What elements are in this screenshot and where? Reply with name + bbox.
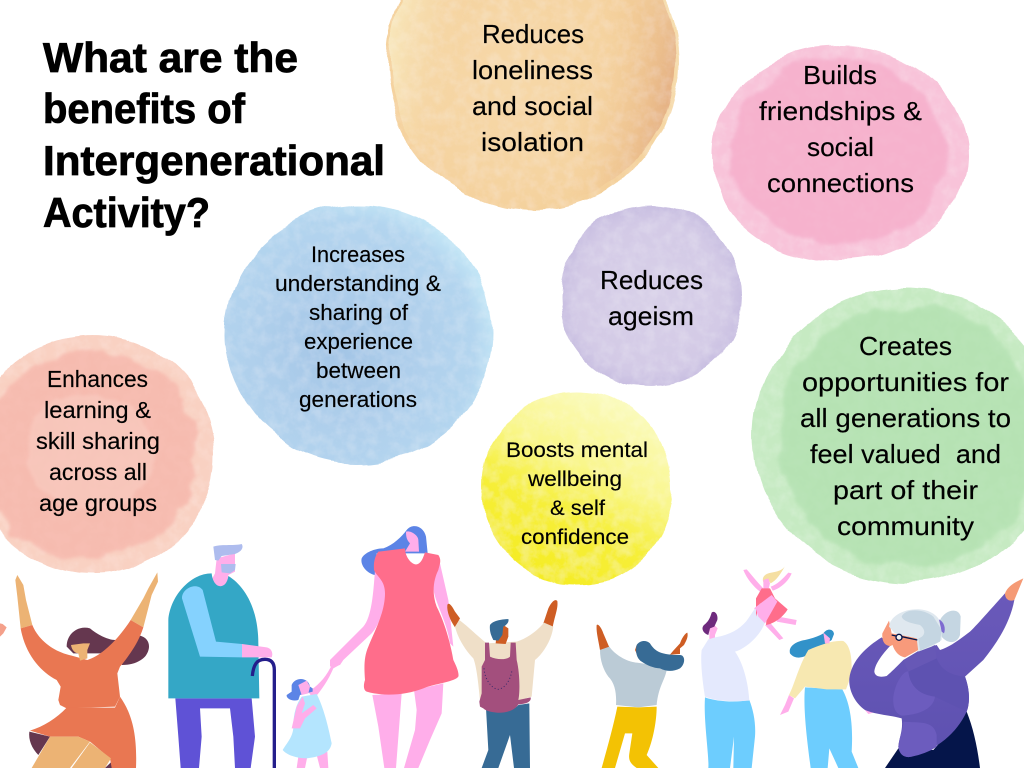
panel: boosts mental wellbeing <box>482 391 672 585</box>
panel: enhances learning <box>0 335 214 575</box>
text: builds friendships: social <box>807 132 874 162</box>
figure: hand and hair continuation <box>680 633 688 668</box>
text: reduces loneliness: and social <box>472 91 593 121</box>
title <box>43 34 385 236</box>
text: boosts mental wellbeing: confidence <box>521 526 629 549</box>
text: enhances learning: across all <box>49 459 147 485</box>
text: reduces loneliness: Reduces <box>482 19 584 49</box>
text: builds friendships <box>759 60 922 198</box>
text: reduces loneliness: loneliness <box>472 55 593 85</box>
text: boosts mental wellbeing <box>506 439 648 549</box>
text: increases understanding: understanding & <box>275 271 441 296</box>
text: enhances learning: Enhances <box>47 366 148 392</box>
text: creates opportunities: all generations to <box>800 403 1011 433</box>
panel: builds friendships <box>712 47 968 261</box>
text: creates opportunities: part of their <box>833 475 978 505</box>
panel: reduces ageism <box>560 205 742 387</box>
text: creates opportunities: feel valued and <box>810 439 1001 469</box>
text: boosts mental wellbeing: & self <box>550 497 605 520</box>
text: reduces ageism <box>600 265 703 331</box>
title: Intergenerational <box>43 137 385 184</box>
text: boosts mental wellbeing: Boosts mental <box>506 439 648 462</box>
figure: boy with backpack <box>447 600 558 768</box>
figure: older man with cane <box>168 544 274 768</box>
text: creates opportunities: opportunities for <box>802 367 1009 397</box>
text: creates opportunities <box>800 331 1011 541</box>
text: builds friendships: friendships & <box>759 96 922 126</box>
text: reduces loneliness <box>472 19 593 157</box>
text: enhances learning <box>36 366 160 516</box>
panel: reduces loneliness <box>387 0 679 211</box>
text: increases understanding: Increases <box>311 242 405 267</box>
figure: dancing woman in orange <box>0 572 158 768</box>
text: enhances learning: skill sharing <box>36 428 160 454</box>
text: reduces ageism: Reduces <box>600 265 703 295</box>
text: reduces ageism: ageism <box>608 301 694 331</box>
text: reduces loneliness: isolation <box>481 127 584 157</box>
text: creates opportunities: community <box>837 511 974 541</box>
figure: grandmother in purple <box>849 593 1014 768</box>
figure: girl in yellow trousers <box>597 625 680 768</box>
text: boosts mental wellbeing: wellbeing <box>527 468 622 491</box>
text: increases understanding: between <box>316 358 401 383</box>
text: increases understanding: experience <box>304 329 413 354</box>
text: builds friendships: connections <box>767 168 914 198</box>
text: increases understanding: sharing of <box>309 300 409 325</box>
title: Activity? <box>43 189 210 236</box>
figure: woman in pink dress <box>330 526 459 768</box>
figure: man lifting child <box>701 566 797 768</box>
text: enhances learning: learning & <box>44 397 151 423</box>
title: What are the <box>43 34 298 81</box>
text: enhances learning: age groups <box>39 490 157 516</box>
text: creates opportunities: Creates <box>859 331 952 361</box>
text: increases understanding <box>275 242 441 412</box>
panel: creates opportunities <box>753 288 1024 584</box>
figure: small girl <box>283 652 340 768</box>
title: benefits of <box>43 85 246 132</box>
figure: grandmother raised hand <box>1005 578 1023 601</box>
text: builds friendships: Builds <box>803 60 877 90</box>
figure: woman in yellow top <box>780 630 858 768</box>
text: increases understanding: generations <box>299 387 417 412</box>
panel: increases understanding <box>225 205 493 463</box>
